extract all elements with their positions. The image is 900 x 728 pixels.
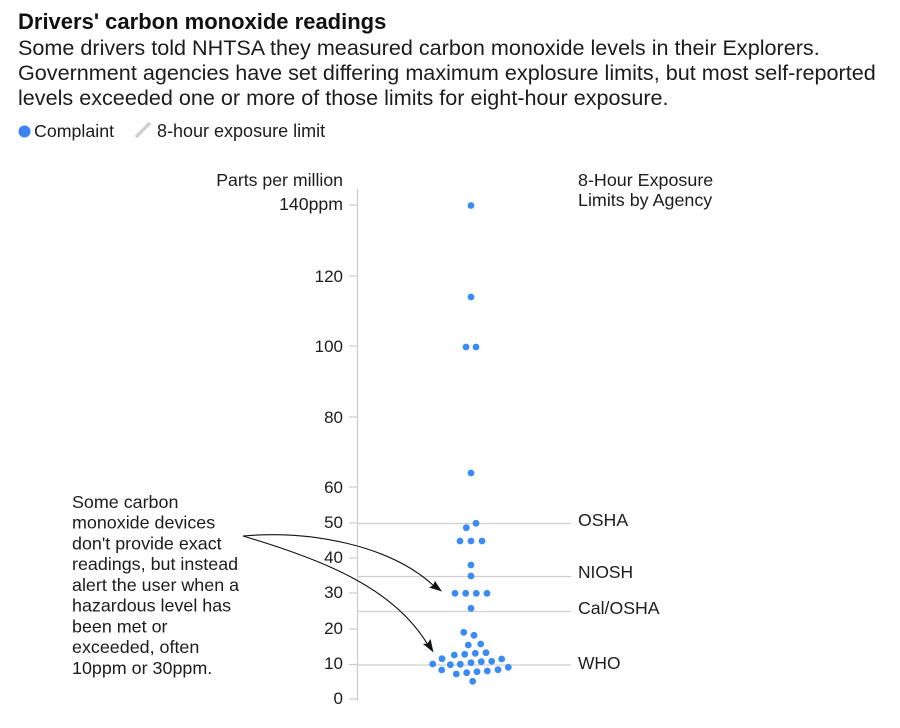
subtitle text block: Government agencies have set differing maximum explosure limits, but most self-reported bbox=[18, 60, 876, 85]
legend: complaint label: Complaint bbox=[34, 121, 114, 141]
Cal/OSHA: Cal/OSHA bbox=[578, 598, 660, 618]
axis labels bbox=[216, 170, 343, 708]
agency heading: 8-Hour Exposure bbox=[578, 170, 713, 190]
exposure limit lines bbox=[357, 524, 571, 665]
legend: complaint dot bbox=[18, 126, 30, 138]
annotation text: hazardous level has bbox=[72, 596, 231, 616]
axis labels: 20 bbox=[324, 619, 343, 638]
annotation text: monoxide devices bbox=[72, 513, 215, 533]
subtitle text block: levels exceeded one or more of those limits for eight-hour exposure. bbox=[18, 85, 669, 110]
axis labels: 40 bbox=[324, 548, 343, 567]
subtitle text block bbox=[18, 35, 876, 110]
annotation text: Some carbon bbox=[72, 492, 178, 512]
axis labels: 10 bbox=[324, 654, 343, 673]
axis labels: 60 bbox=[324, 478, 343, 497]
arrow: to 10ppm dots bbox=[243, 536, 434, 652]
axis labels: 100 bbox=[315, 337, 343, 356]
y axis bbox=[216, 170, 358, 708]
axis line bbox=[356, 189, 358, 701]
annotation text bbox=[72, 492, 239, 678]
axis labels: 80 bbox=[324, 408, 343, 427]
annotation text: readings, but instead bbox=[72, 554, 238, 574]
annotation text: don't provide exact bbox=[72, 534, 222, 554]
legend: limit label: 8-hour exposure limit bbox=[157, 121, 325, 141]
legend: limit line swatch bbox=[136, 123, 150, 137]
complaint dots bbox=[429, 202, 512, 685]
annotation text: 10ppm or 30ppm. bbox=[72, 658, 212, 678]
agency labels bbox=[578, 170, 713, 673]
axis ticks bbox=[349, 205, 357, 699]
annotation text: alert the user when a bbox=[72, 575, 239, 595]
axis labels: 30 bbox=[324, 583, 343, 602]
axis labels: 0 bbox=[334, 689, 343, 708]
arrow: to 30ppm dots bbox=[243, 535, 442, 592]
annotation text: exceeded, often bbox=[72, 637, 199, 657]
WHO: WHO bbox=[578, 653, 621, 673]
legend bbox=[18, 121, 325, 141]
axis labels: 50 bbox=[324, 513, 343, 532]
axis labels: 140ppm bbox=[279, 194, 343, 214]
agency labels: Limits by Agency bbox=[578, 190, 712, 210]
title: Drivers' carbon monoxide readings bbox=[18, 9, 386, 34]
subtitle text block: Some drivers told NHTSA they measured carbon monoxide levels in their Explorers. bbox=[18, 35, 820, 60]
NIOSH: NIOSH bbox=[578, 562, 633, 582]
axis labels: Parts per million bbox=[216, 170, 343, 190]
OSHA: OSHA bbox=[578, 510, 628, 530]
annotation text: been met or bbox=[72, 616, 168, 636]
axis labels: 120 bbox=[315, 267, 343, 286]
